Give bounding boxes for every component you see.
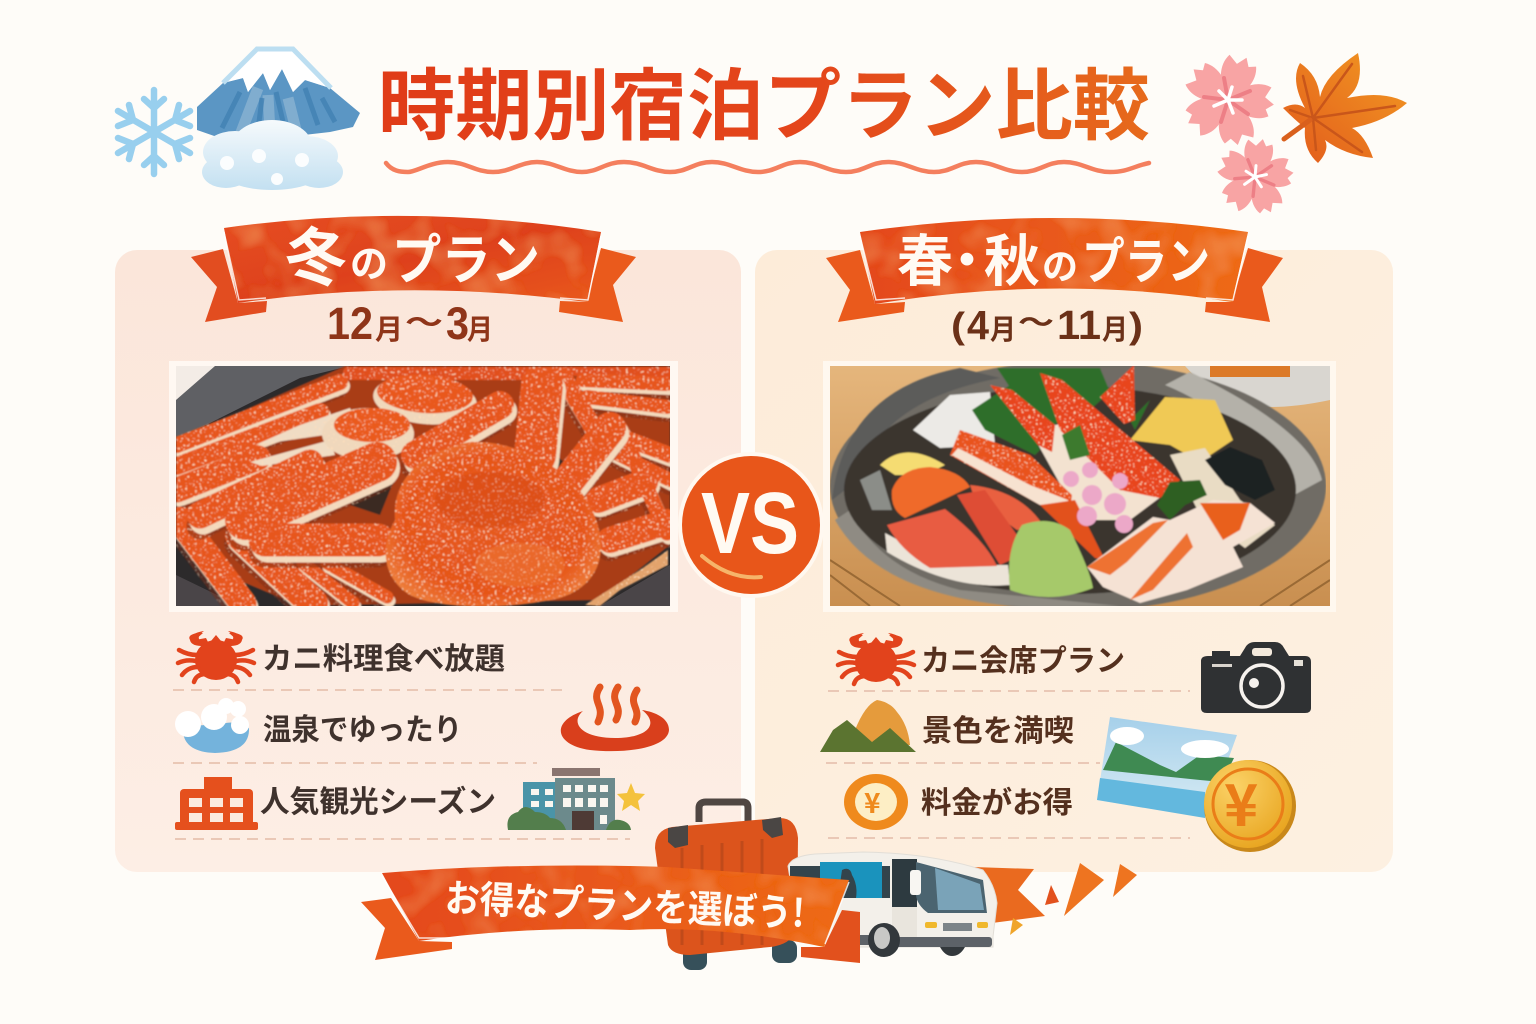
ribbon: winter plan bbox=[191, 204, 636, 322]
ribbon title text: 秋 bbox=[984, 217, 1040, 298]
icon: snowflake bbox=[118, 90, 190, 174]
flowers bbox=[1063, 462, 1133, 533]
icon: hot spring wave bbox=[175, 698, 249, 753]
ribbon title text: プラン bbox=[1082, 222, 1210, 294]
date: spring autumn: 月 bbox=[1102, 308, 1128, 348]
date: winter: 月 bbox=[467, 308, 493, 348]
text: enjoy scenery: 景色を満喫 bbox=[922, 706, 1074, 750]
date: spring autumn: ( bbox=[951, 305, 965, 346]
icon: autumn mountains bbox=[820, 700, 916, 752]
parsley bbox=[1157, 480, 1207, 520]
crab pieces bbox=[1038, 423, 1160, 522]
text: crab buffet: カニ料理食べ放題 bbox=[262, 634, 505, 678]
date: winter: 12 bbox=[327, 298, 373, 349]
date: winter: 月 bbox=[375, 308, 403, 348]
icon: yen coin large: ¥ bbox=[1224, 759, 1258, 843]
ribbon title text: の bbox=[1042, 238, 1078, 290]
date: spring autumn: ～ bbox=[1018, 301, 1054, 340]
icon: hotel with star bbox=[507, 768, 645, 830]
ribbon title text: 春 bbox=[897, 217, 953, 298]
list: winter features bbox=[173, 631, 669, 839]
text: tourist season: 人気観光シーズン bbox=[260, 777, 496, 821]
panel: winter plan background bbox=[115, 250, 741, 872]
salmon and tuna bbox=[892, 467, 970, 518]
icon: camera bbox=[1201, 642, 1311, 713]
icon: yen coin small bbox=[844, 774, 908, 830]
lower crab legs bbox=[1087, 500, 1275, 603]
ribbon title text: プラン bbox=[392, 216, 540, 295]
icon: maple leaf bbox=[1283, 53, 1407, 163]
icon: snow cloud bbox=[202, 120, 343, 190]
icon: postcard bbox=[1097, 717, 1237, 818]
text: crab kaiseki: カニ会席プラン bbox=[921, 636, 1125, 680]
date: spring autumn: 11 bbox=[1057, 302, 1101, 348]
ribbon: call to action bbox=[361, 865, 860, 963]
title: 時期別宿泊プラン比較 bbox=[378, 44, 1150, 156]
ribbon title text bbox=[897, 217, 1210, 298]
date: spring autumn: 4 bbox=[967, 302, 989, 348]
ribbon title text: ・ bbox=[942, 221, 992, 293]
photo: snow crab bbox=[169, 361, 678, 612]
icon: mount fuji bbox=[197, 49, 360, 140]
icon: crab bbox=[178, 631, 254, 682]
date: winter bbox=[327, 298, 493, 349]
text: hot spring: 温泉でゆったり bbox=[263, 705, 462, 749]
icon: suitcase bbox=[655, 802, 798, 970]
bunting decoration bbox=[973, 863, 1137, 935]
ribbon text: お得なプランを選ぼう! bbox=[444, 867, 806, 938]
date: winter: ～ bbox=[405, 301, 443, 341]
date: spring autumn bbox=[951, 301, 1143, 348]
wasabi bbox=[1009, 521, 1093, 597]
date: spring autumn: 月 bbox=[990, 308, 1016, 348]
icon: crab bbox=[838, 633, 914, 684]
icon: bus bbox=[788, 852, 997, 957]
garnish bbox=[913, 392, 995, 448]
date: spring autumn: ) bbox=[1129, 305, 1143, 346]
icon: onsen mark bbox=[561, 687, 669, 751]
icon: cherry blossoms bbox=[1180, 51, 1302, 226]
ribbon title text bbox=[281, 204, 540, 300]
date: winter: 3 bbox=[446, 298, 469, 349]
icon: yen coin small: ¥ bbox=[864, 782, 881, 822]
ribbon title text: 冬 bbox=[281, 204, 352, 300]
vs badge: VS bbox=[701, 475, 799, 572]
carapace bbox=[386, 442, 601, 607]
ribbon: spring autumn plan bbox=[826, 217, 1283, 322]
icon: yen coin large bbox=[1204, 759, 1296, 852]
ribbon title text: の bbox=[350, 233, 388, 288]
list: spring autumn features bbox=[820, 633, 1311, 852]
text: good price: 料金がお得 bbox=[921, 778, 1073, 822]
icon: building bbox=[175, 777, 258, 830]
photo: crab sashimi platter bbox=[823, 361, 1336, 612]
panel: spring autumn plan background bbox=[755, 250, 1393, 872]
upper claw bbox=[372, 382, 478, 426]
title underline bbox=[386, 162, 1149, 172]
vs badge bbox=[678, 452, 824, 598]
